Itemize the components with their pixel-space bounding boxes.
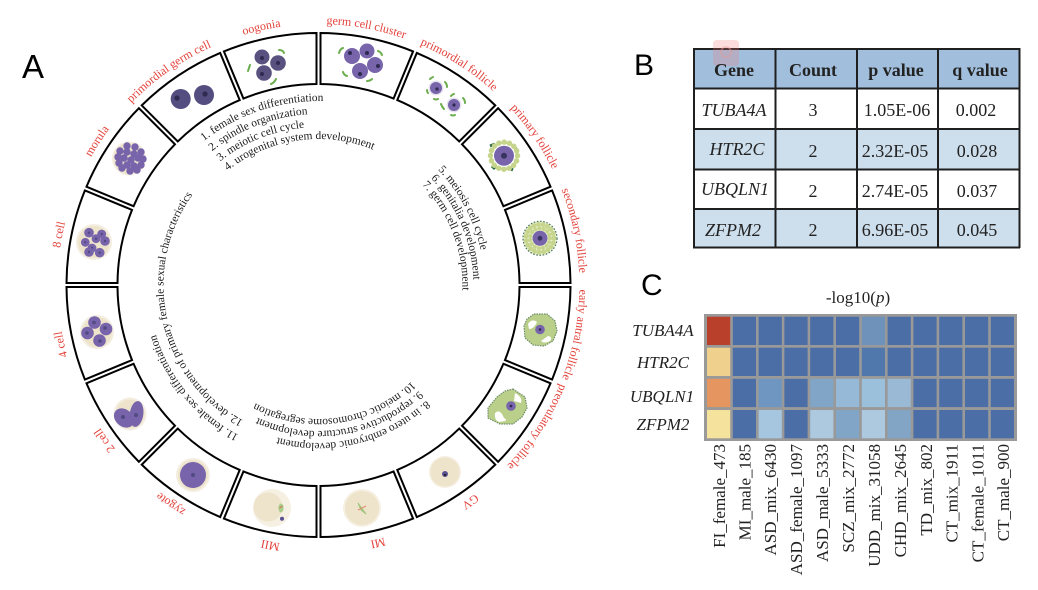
stage labels: primordial follicle [419,40,496,91]
stage labels: early antral follicle [562,290,587,380]
table header: p value [868,60,924,80]
heatmap row labels [630,321,694,434]
stage labels: MI [370,538,386,548]
enrichment terms 11-12: 11. female sex differentiation [151,334,238,440]
row: UBQLN1: 2.74E-05 [862,181,928,201]
heatmap column labels: ASD_female_1097 [787,444,806,575]
stage labels: primary follicle [508,104,557,169]
panel A: oogenesis ring [52,18,588,551]
panel letter A: A [22,48,44,85]
enrichment terms 1-4: 1. female sex differentiation [200,94,324,140]
stage labels: zygote [157,492,186,514]
panel letter B: B [634,49,654,82]
row: UBQLN1: 0.037 [957,181,997,201]
heatmap row labels: UBQLN1 [630,387,694,406]
magnifier watermark [713,40,739,66]
stage labels: 2 cell [94,428,115,453]
enrichment terms 1-4 [200,94,375,170]
stage labels: germ cell cluster [326,18,406,38]
heatmap column labels: ASD_mix_6430 [761,444,780,555]
row: HTR2C: HTR2C [708,139,765,159]
stage labels [52,18,588,551]
icon: MII oocyte [253,489,291,527]
heatmap column labels: CT_female_1011 [968,444,988,562]
row: HTR2C [708,139,997,161]
row: UBQLN1: UBQLN1 [701,179,769,199]
row: ZFPM2: 2 [808,220,818,240]
enrichment terms 5-7: 7. germ cell development [423,180,469,290]
heatmap column labels: SCZ_mix_2772 [839,444,858,553]
heatmap column labels: FI_female_473 [710,444,729,548]
panel B: gene table [693,40,1020,248]
heatmap column labels: ASD_male_5333 [813,444,832,562]
icon: germ cell cluster [339,44,383,81]
enrichment terms 5-7: 6. genitalia development [432,174,480,280]
icon: 4 cell [80,315,114,349]
icon: primordial germ cells [171,85,214,109]
row: TUBA4A: 0.002 [956,100,996,120]
icon: oogonia [248,50,286,84]
row: ZFPM2 [705,220,997,240]
panel C: heatmap [630,288,1017,575]
enrichment terms 1-4: 4. urogenital system development [226,131,375,170]
heatmap row labels: TUBA4A [632,321,694,340]
enrichment terms 8-10: 10. meiotic chromosome segregation [254,382,416,424]
row: HTR2C: 2 [808,141,818,161]
row: TUBA4A [702,100,996,120]
table header [714,60,1008,80]
heatmap row labels: HTR2C [636,353,690,372]
row: UBQLN1 [701,179,997,201]
icon: zygote [176,458,210,492]
row: HTR2C: 0.028 [957,141,997,161]
enrichment terms 5-7: 5. meiosis cell cycle [438,165,487,250]
heatmap frame [704,314,1017,441]
row: ZFPM2: ZFPM2 [705,220,761,240]
stage labels: preovulatory follicle [508,382,565,468]
stage labels: 4 cell [54,331,66,357]
panel letter C: C [641,269,663,302]
icon: primordial follicle [427,77,465,116]
enrichment terms 11-12: 12. development of primary female sexual characteristics [156,192,242,426]
stage labels: MII [260,540,280,551]
heatmap title: -log10(p) [826,288,890,307]
icon: preovulatory follicle [488,389,527,424]
icon: 2 cell [110,398,146,432]
heatmap column labels: CT_mix_1911 [942,444,962,543]
icon: early antral follicle [524,314,557,346]
table header: Count [789,60,837,80]
enrichment terms 1-4: 3. meiotic cell cycle [216,120,304,161]
row: TUBA4A: TUBA4A [702,100,768,120]
stage labels: secondary follicle [562,188,588,272]
heatmap column labels [710,444,1013,575]
table cells [693,48,1020,248]
icon: GV oocyte [429,456,461,488]
row: HTR2C: 2.32E-05 [862,141,928,161]
stage labels: morula [86,126,110,157]
heatmap column labels: MI_male_185 [736,444,754,540]
enrichment terms 1-4: 2. spindle organization [208,108,308,151]
heatmap row labels: ZFPM2 [637,415,690,434]
icon: MI oocyte [343,489,381,527]
heatmap column labels: UDD_mix_31058 [865,444,884,567]
heatmap column labels: CT_male_900 [994,444,1013,541]
ring segments [49,16,588,554]
stage labels: 8 cell [52,222,66,248]
icon: 8 cell [76,224,112,260]
icon: morula [112,142,147,176]
enrichment terms 8-10: 9. reproductive structure development [256,391,423,439]
icon: primary follicle [490,142,518,170]
row: UBQLN1: 2 [808,181,818,201]
icon: secondary follicle [523,221,557,255]
stage labels: GV [464,495,478,510]
heatmap column labels: TD_mix_802 [917,444,936,536]
heatmap column labels: CHD_mix_2645 [891,444,910,557]
heatmap cells [707,317,1014,438]
stage labels: primordial germ cell [128,40,212,105]
row: ZFPM2: 0.045 [957,220,997,240]
enrichment terms 8-10: 8. in utero embryonic development [276,402,430,451]
row: ZFPM2: 6.96E-05 [862,220,928,240]
row: TUBA4A: 1.05E-06 [864,100,930,120]
row: TUBA4A: 3 [808,100,818,120]
stage labels: oogonia [242,20,281,34]
table header: q value [952,60,1008,80]
table header: Gene [714,60,754,80]
